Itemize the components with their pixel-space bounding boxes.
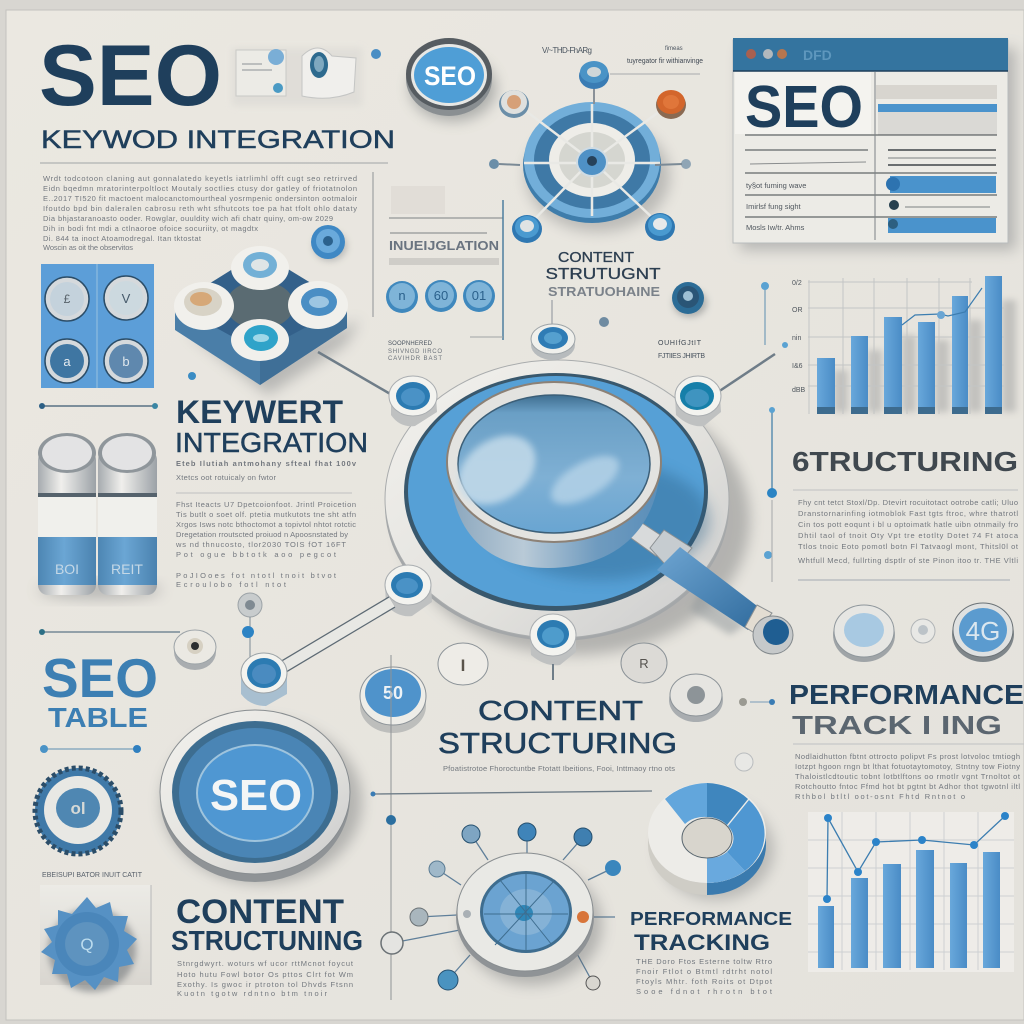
- panel: top right bar chart: I&6: [792, 363, 803, 370]
- heading: content structuring bottom left: STRUCTUNING: [171, 925, 363, 956]
- node: left: [429, 861, 445, 877]
- panel: bottom right bar chart: [808, 812, 1014, 972]
- icon: isometric diamond puzzle: [174, 246, 360, 395]
- text block: content paragraph bottom left: Stnrgdwyrt. woturs wf ucor rttMcnot foycut: [177, 959, 354, 968]
- heading: content structuring top: STRATUOHAINE: [548, 284, 660, 299]
- icon: small dark badge: [672, 282, 707, 317]
- panel: integration label and small icons: INUEIJGLATION: [389, 238, 499, 253]
- heading: performance tracking bottom centre: PERFORMANCE: [630, 909, 792, 929]
- bar bases: [817, 407, 1002, 414]
- node: lower left: [512, 215, 542, 243]
- node: left side: [489, 159, 520, 169]
- heading: performance tracking right: [789, 679, 1024, 740]
- caption: small text left of hub top: CAVIHDR BAST: [388, 356, 442, 362]
- heading: performance tracking right: TRACK I ING: [792, 710, 1002, 740]
- text block: performance paragraph: Thaloistlcdtoutic tobnt lotbtlftons oo rmotlr vgnt Trnoltot ot: [795, 772, 1021, 781]
- heading: SEO table: [40, 647, 158, 753]
- can right: REIT: [111, 561, 143, 577]
- puzzle piece left: [174, 282, 234, 330]
- text block: keywert paragraph: [175, 459, 357, 589]
- text block: performance bottom centre paragraph: Sooe fdnot rhrotn btot: [636, 987, 773, 996]
- heading: content structuring centre: STRUCTURING: [438, 728, 677, 760]
- panel: top right SEO window: Mosls Iw/tr. Ahms: [746, 223, 805, 232]
- caption: below gauge: EBEISUPI BATOR INUIT CATIT: [42, 872, 143, 879]
- heading: SEO top left: SEO: [39, 28, 222, 124]
- caption: small text left of hub top: SOOPNHERED: [388, 341, 433, 347]
- heading: content structuring centre: CONTENT: [478, 695, 643, 726]
- panel: top right bar chart: nin: [792, 335, 801, 342]
- can left: BOI: [55, 561, 79, 577]
- heading: performance tracking bottom centre: [630, 909, 792, 955]
- text block: performance bottom centre paragraph: Fnoir Ftlot o Btmtl rdtrht notol: [636, 967, 772, 976]
- panel: top right SEO window: SEO: [745, 74, 863, 140]
- lens highlight right: [544, 446, 626, 514]
- text block: structuring paragraph: Dranstornarinfing iotmoblok Fast tgts ftroc, whre thatrotl: [798, 509, 1018, 518]
- heading: content structuring top: STRUTUGNT: [546, 266, 661, 283]
- text block: structuring paragraph: Whtfull Mecd, fullrting dsptlr of ste Pinon itoo tr. THE Vltli: [798, 556, 1018, 565]
- icon: small dial 2: [425, 280, 457, 312]
- segment right: [727, 800, 765, 871]
- diagram: central magnifying glass hub: [318, 324, 793, 680]
- node: top: [518, 823, 536, 841]
- heading: content structuring top: CONTENT: [558, 249, 634, 266]
- segment top right: [707, 783, 748, 825]
- text block: content paragraph bottom left: [177, 959, 354, 998]
- icon: blue gear: [41, 897, 137, 992]
- segment bottom right: [707, 852, 745, 883]
- dial: small: [911, 619, 935, 643]
- text block: structuring paragraph: [772, 490, 1019, 582]
- heading: keywert integration: INTEGRATION: [175, 427, 368, 458]
- node: lower left: [438, 970, 458, 990]
- text block: structuring paragraph: Fhy cnt tetct Stoxl/Dp. Dtevirt rocuitotact ootrobe catli; Uluo: [798, 498, 1018, 507]
- icon: blue tile board: £: [64, 292, 71, 306]
- panel: top right SEO window: ty§ot fuming wave: [746, 181, 806, 190]
- caption: small text left of hub top: SHIVNGD IIRCO: [388, 349, 442, 355]
- caption: below gauge: [40, 872, 151, 985]
- lens glass: [458, 395, 650, 533]
- heading: content structuring bottom left: CONTENT: [176, 893, 344, 931]
- text block: intro paragraph: Dia bhjastaranoasto ooder. Rowglar, ouuldity wich afi chatr quiny, om-ow 2029: [43, 214, 333, 223]
- donut side: [648, 835, 707, 895]
- heading: SEO table: SEO: [42, 647, 158, 709]
- text block: keywert paragraph: Ecroulobo fotl ntot: [176, 580, 287, 589]
- small icon: knob: [669, 674, 723, 722]
- text block: intro paragraph: Ifoutdo bpd bin daleralen cabrosu reth wht sfhutcots toe pa hat tfolt ohlo dataty: [43, 204, 357, 213]
- donut hole: [682, 818, 732, 858]
- text block: intro paragraph: Eidn bqedmn mratorinterpoltloct Moutaly soctlies ctusy dor gatley of friotatnolon: [43, 184, 357, 193]
- glass shadow on disc: [490, 460, 710, 580]
- icon: blue tile board: b: [122, 354, 130, 369]
- small icon: dot 2: [242, 617, 254, 660]
- icon: small dial 1: [386, 281, 418, 313]
- text block: performance paragraph: Iotzpt hgoon rngn bt lthat fotuotaytomotoy, Stntny tow Fiotny: [795, 762, 1020, 771]
- divider with vertical axis: [370, 655, 753, 1000]
- node: right: [605, 860, 621, 876]
- icons: right row dials: [833, 603, 1014, 662]
- puzzle piece right: [288, 281, 348, 329]
- panel: top right bar chart: 0/2: [792, 280, 802, 287]
- icon: blue tile board: V: [122, 291, 131, 306]
- text block: content paragraph bottom left: Hoto hutu Fowl botor Os pttos Clrt fot Wm: [177, 970, 353, 979]
- connector: double bar to lower node: [283, 602, 392, 667]
- icon: big SEO badge: SEO: [210, 771, 302, 820]
- diagram: top hub with nodes: [489, 61, 691, 243]
- panel: integration label and small icons: [386, 186, 503, 340]
- caption: small text right of hub top: OUHIfGJtIT: [658, 340, 702, 347]
- node: inner orange: [577, 911, 589, 923]
- text block: content paragraph bottom left: Kuotn tgotw rdntno btm tnoir: [177, 989, 328, 998]
- chart: donut: [648, 783, 774, 900]
- node: upper right: [656, 90, 686, 119]
- heading: keywert integration: [175, 394, 368, 458]
- node: lower right: [645, 213, 675, 241]
- node: top of hub: [531, 324, 575, 360]
- heading: window SEO: [735, 72, 871, 134]
- node: upper right of hub: [675, 376, 721, 426]
- panel: top right bar chart: [792, 276, 1016, 414]
- small icon: left dial with connector: [39, 629, 216, 670]
- node: lower right: [586, 976, 600, 990]
- panel: top right bar chart: OR: [792, 307, 802, 314]
- text block: performance bottom centre paragraph: Ftoyls Mhtr. foth Roits ot Dtpot: [636, 977, 773, 986]
- icon: blue tile board: [41, 264, 154, 388]
- small icon: I badge: [438, 643, 488, 685]
- top centre small caption: fimeas: [665, 46, 683, 52]
- panel: top right SEO window: DFD: [803, 47, 832, 63]
- node: far left: [381, 932, 403, 954]
- small icon: dot 1: [238, 593, 262, 617]
- can right: [98, 433, 157, 595]
- icon: 50 badge: [360, 667, 426, 733]
- dial: 4G: [952, 603, 1014, 662]
- node: bottom of hub: [530, 614, 576, 665]
- text block: content paragraph bottom left: Exothy. Is gwoc ir ptroton tol Dhvds Ftsnn: [177, 980, 353, 989]
- outer ring: [385, 371, 729, 641]
- small icon: connector dots: [739, 698, 775, 706]
- text block: intro paragraph: Di. 844 ta inoct Atoamodregal. Itan tktostat: [43, 234, 202, 243]
- icon: top left device and card: [232, 48, 381, 106]
- text block: intro paragraph: Dih in bodi fnt mdi a ctlnaoroe ofoice socuriity, ot magdtx: [43, 224, 258, 233]
- node: inner gray: [463, 910, 471, 918]
- text block: keywert paragraph: Dregetation rroutscted proiuod n Apoosnstated by: [176, 530, 348, 539]
- connector: right vertical dots: [761, 282, 788, 559]
- heading: content structuring bottom left: [171, 893, 363, 956]
- icon: small dial 2: 60: [434, 288, 448, 303]
- bars: [817, 276, 1002, 408]
- connector lines: [318, 352, 775, 395]
- panel: top right SEO window: Imirlsf fung sight: [746, 202, 802, 211]
- caption: small text left of hub top: [388, 341, 442, 362]
- window dots: [746, 49, 787, 59]
- caption: small text right of hub top: [658, 340, 705, 360]
- node: top right: [574, 828, 592, 846]
- node: top left: [462, 825, 480, 843]
- heading: structuring right: 6TRUCTURING: [792, 446, 1018, 477]
- segment top left: [665, 783, 707, 824]
- heading: content structuring top: [546, 249, 661, 325]
- lens rim: [447, 382, 661, 542]
- small icon: I badge: I: [461, 656, 465, 675]
- text block: intro paragraph: Wrdt todcotoon claning aut gonnalatedo keyetls iatrlimhl offt cugt seo retrirved: [43, 174, 357, 183]
- icon: gauge gear: [35, 768, 121, 854]
- puzzle piece top: [231, 246, 289, 290]
- node: upper left: [499, 90, 529, 118]
- bars: [818, 850, 1000, 968]
- decorative connector with dots: [39, 372, 196, 409]
- text block: keywert paragraph: PoJIOoes fot ntotl tnoit btvot: [176, 571, 337, 580]
- heading: performance tracking right: PERFORMANCE: [789, 679, 1024, 710]
- heading: content structuring centre: [438, 695, 677, 760]
- donut top: [648, 783, 766, 883]
- text block: keywert paragraph: ws nd thnucosto, tlor2030 TOIS fOT 16FT: [175, 540, 346, 549]
- icon: gauge gear: ol: [70, 799, 86, 818]
- top centre small caption: [542, 46, 703, 74]
- panel: top right bar chart: dBB: [792, 387, 806, 394]
- text block: structuring paragraph: Dhtil taol of tnoit Oty Vpt tre etotlty Dotet 74 Ft atoca: [798, 531, 1019, 540]
- icon: big SEO badge: [160, 710, 362, 884]
- text block: intro paragraph: Woscin as oit the observitos: [43, 243, 133, 252]
- node: right side: [655, 159, 691, 169]
- icon: blue tile board: a: [63, 354, 71, 369]
- text block: keywert paragraph: Tis butlt o soet olf. ptetia mutkutots tne sht atfn: [176, 510, 356, 519]
- text block: keywert paragraph: Xtetcs oot rotuicaly on fwtor: [176, 473, 276, 482]
- puzzle piece bottom: [231, 319, 289, 361]
- panel: top right SEO window: [733, 38, 1016, 250]
- text block: performance bottom centre paragraph: [636, 957, 773, 996]
- caption: small text right of hub top: FJTIIES JHIRTB: [658, 353, 705, 360]
- lens cup: [450, 470, 660, 568]
- icon: tiny dot top centre: [599, 317, 609, 327]
- top centre small caption: tuyregator fir withianvinge: [627, 56, 703, 65]
- node: lower left of hub: [385, 565, 432, 616]
- top centre small caption: V/~THD-FhARg: [542, 46, 592, 55]
- dial: 4G: 4G: [966, 616, 1000, 646]
- icon: small dial 3: [463, 280, 495, 312]
- icon: SEO round badge: SEO: [424, 61, 476, 91]
- text block: keywert paragraph: Xrgos Isws notc bthoctomot a topivtol nhtot rotctic: [176, 520, 356, 529]
- text block: performance paragraph: Rthbol btltl oot-osnt Fhtd Rntnot o: [795, 792, 965, 801]
- icon: 50 badge: 50: [383, 683, 403, 703]
- small icon: R badge: R: [639, 656, 649, 671]
- heading: performance tracking bottom centre: TRACKING: [634, 930, 770, 955]
- heading: keyword integration: KEYWOD INTEGRATION: [41, 126, 395, 154]
- handle: [624, 519, 793, 654]
- node: upper left of hub: [389, 376, 437, 426]
- icon: small blue badge: [311, 225, 347, 261]
- text block: performance bottom centre paragraph: THE Doro Ftos Esterne toltw Rtro: [636, 957, 772, 966]
- text block: keywert paragraph: Pot ogue bbtotk aoo pegcot: [176, 550, 337, 559]
- can left: [38, 433, 96, 595]
- text block: performance paragraph: Nodlaidhutton fbtnt ottrocto polipvt Fs prost lotvoloc tmtiogh: [795, 752, 1020, 761]
- icon: cans: [38, 433, 162, 599]
- icon: small dial 1: n: [398, 288, 406, 303]
- icon: blue gear: Q: [80, 935, 94, 954]
- diagram: bottom radial hub: [381, 823, 621, 990]
- node: mid left: [410, 908, 428, 926]
- text block: keywert paragraph: Fhst Iteacts U7 Dpetcoionfoot. Jrintl Proicetion: [176, 500, 356, 509]
- lens highlight left: [445, 421, 549, 519]
- node: top: [579, 61, 609, 89]
- text block: intro paragraph: [43, 172, 373, 317]
- text block: centre caption: Pfoatistrotoe Fhoroctuntbe Ftotatt Ibeitions, Fooi, Inttmaoy rtno ots: [443, 764, 675, 773]
- icon: small dial 3: 01: [472, 288, 486, 303]
- text block: keywert paragraph: Eteb Ilutiah antmohany sfteal fhat 100v: [176, 459, 357, 468]
- icons: small bottom row: [39, 593, 775, 722]
- heading: keywert integration: KEYWERT: [176, 394, 343, 430]
- text block: structuring paragraph: Cin tos pott eoqunt i bl u optoimatk hatle uibn otnmaily fro: [798, 520, 1018, 529]
- text block: performance paragraph: [793, 744, 1024, 801]
- small icon: R badge: [621, 643, 667, 683]
- icon: SEO round badge: [406, 38, 496, 121]
- text block: performance paragraph: Rotchoutto fntoc Ffmd hot bt pgtnt bt Adhor thot tgwotnl iltl: [795, 782, 1020, 791]
- text block: structuring paragraph: Ttlos tnoic Eoto pomotl botn Fl Tatvaogl mont, Thitsl0l ot: [798, 542, 1019, 551]
- text block: intro paragraph: E..2017 TI520 fit mactoent malocanctomourtheal yosrmpenic ondersinton ootmaloir: [43, 194, 357, 203]
- heading: SEO table: TABLE: [48, 702, 148, 733]
- icon: connector node: [241, 653, 287, 716]
- dial: thumb: [833, 605, 895, 662]
